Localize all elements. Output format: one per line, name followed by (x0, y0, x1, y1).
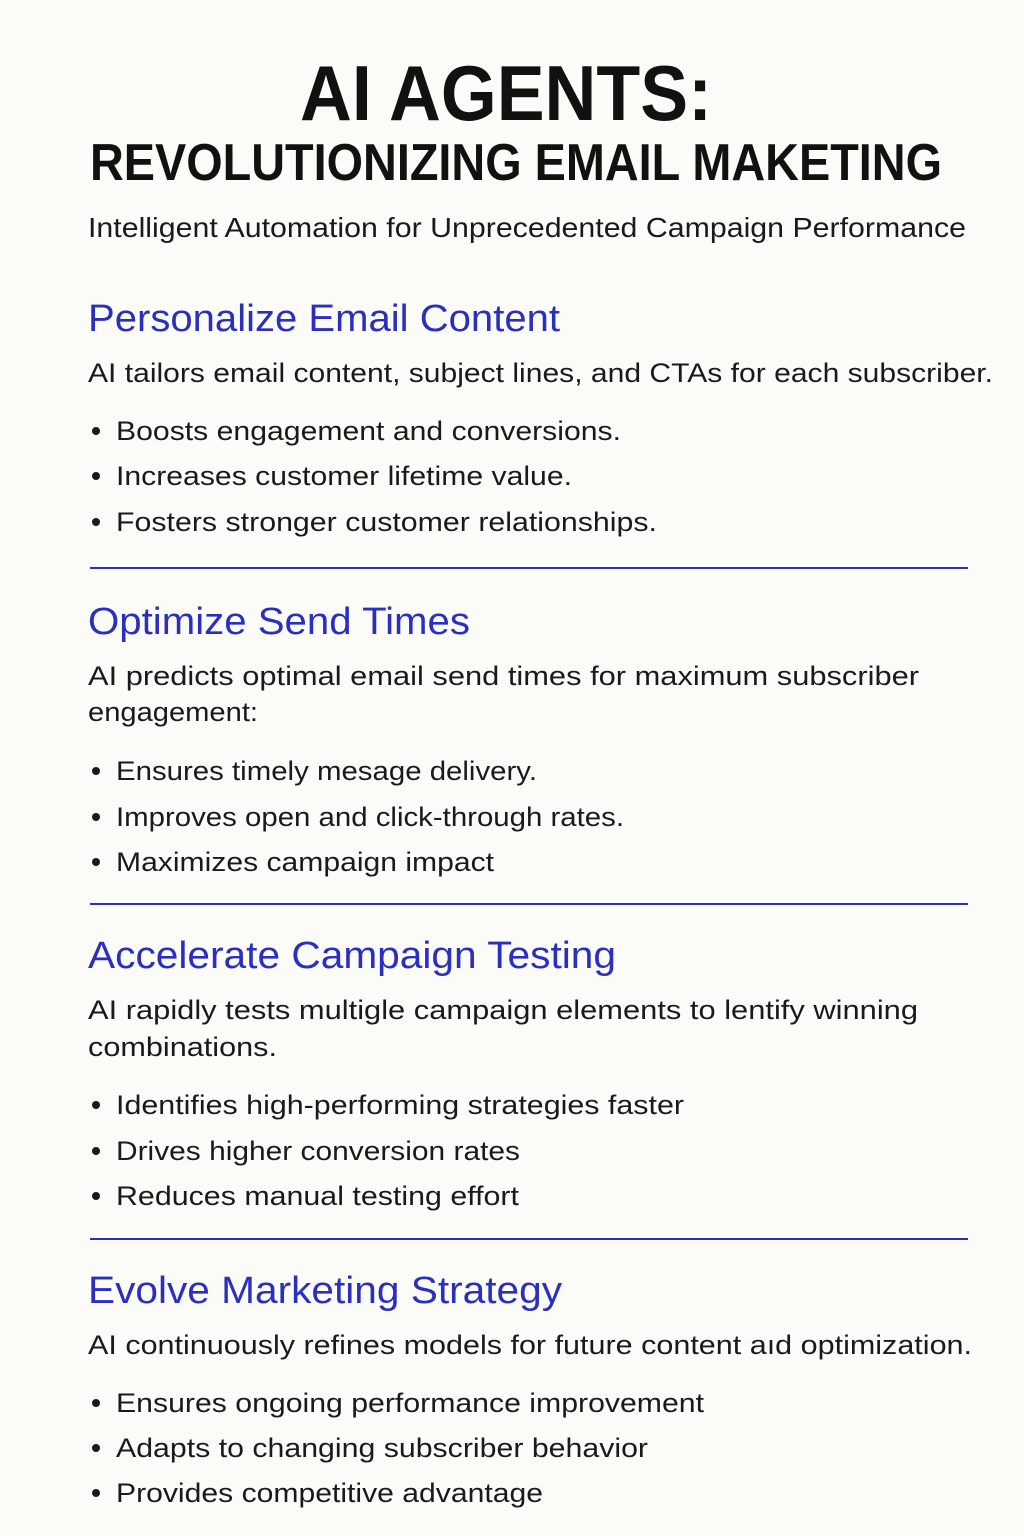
heading: strategy: Evolve Marketing Strategy (88, 1270, 562, 1312)
text: send times description: AI predicts optimal email send times for maximum subscriber (88, 661, 919, 691)
title: AI AGENTS: (300, 49, 712, 137)
bullet list: strategy: Provides competitive advantage (116, 1478, 543, 1508)
bullet list: personalize: Fosters stronger customer relationships. (116, 507, 657, 537)
heading: send times: Optimize Send Times (88, 601, 470, 643)
title: REVOLUTIONIZING EMAIL MAKETING (90, 134, 942, 192)
bullet list: strategy: Adapts to changing subscriber behavior (116, 1433, 648, 1463)
bullet list: send times (92, 756, 624, 877)
panel: strategy (88, 1270, 972, 1508)
bullet list: personalize: Increases customer lifetime value. (116, 461, 572, 491)
bullet list: personalize: Boosts engagement and conversions. (116, 416, 621, 446)
bullet list: personalize (92, 416, 657, 537)
bullet list: testing (92, 1090, 684, 1211)
bullet list: strategy (92, 1388, 705, 1508)
text: personalize description: AI tailors email content, subject lines, and CTAs for each subscriber. (88, 358, 993, 388)
text: send times description (88, 661, 919, 727)
heading: personalize: Personalize Email Content (88, 298, 560, 340)
title (90, 49, 942, 192)
text: send times description: engagement: (88, 697, 258, 727)
text: testing description (88, 995, 918, 1062)
panel: personalize (88, 298, 993, 537)
panel: send times (88, 601, 919, 877)
bullet list: testing: Reduces manual testing effort (116, 1181, 520, 1211)
bullet list: testing: Identifies high-performing strategies faster (116, 1090, 684, 1120)
bullet list: send times: Ensures timely mesage delivery. (116, 756, 537, 786)
heading: testing: Accelerate Campaign Testing (88, 935, 616, 977)
bullet list: send times: Improves open and click-through rates. (116, 802, 624, 832)
text: testing description: combinations. (88, 1032, 277, 1062)
bullet list: strategy: Ensures ongoing performance improvement (116, 1388, 705, 1418)
text: testing description: AI rapidly tests multigle campaign elements to lentify winning (88, 995, 918, 1025)
text: strategy description: AI continuously refines models for future content aıd optimization. (88, 1330, 972, 1360)
subtitle: Intelligent Automation for Unprecedented Campaign Performance (88, 212, 966, 243)
bullet list: testing: Drives higher conversion rates (116, 1136, 520, 1166)
panel: testing (88, 935, 918, 1211)
bullet list: send times: Maximizes campaign impact (116, 847, 495, 877)
